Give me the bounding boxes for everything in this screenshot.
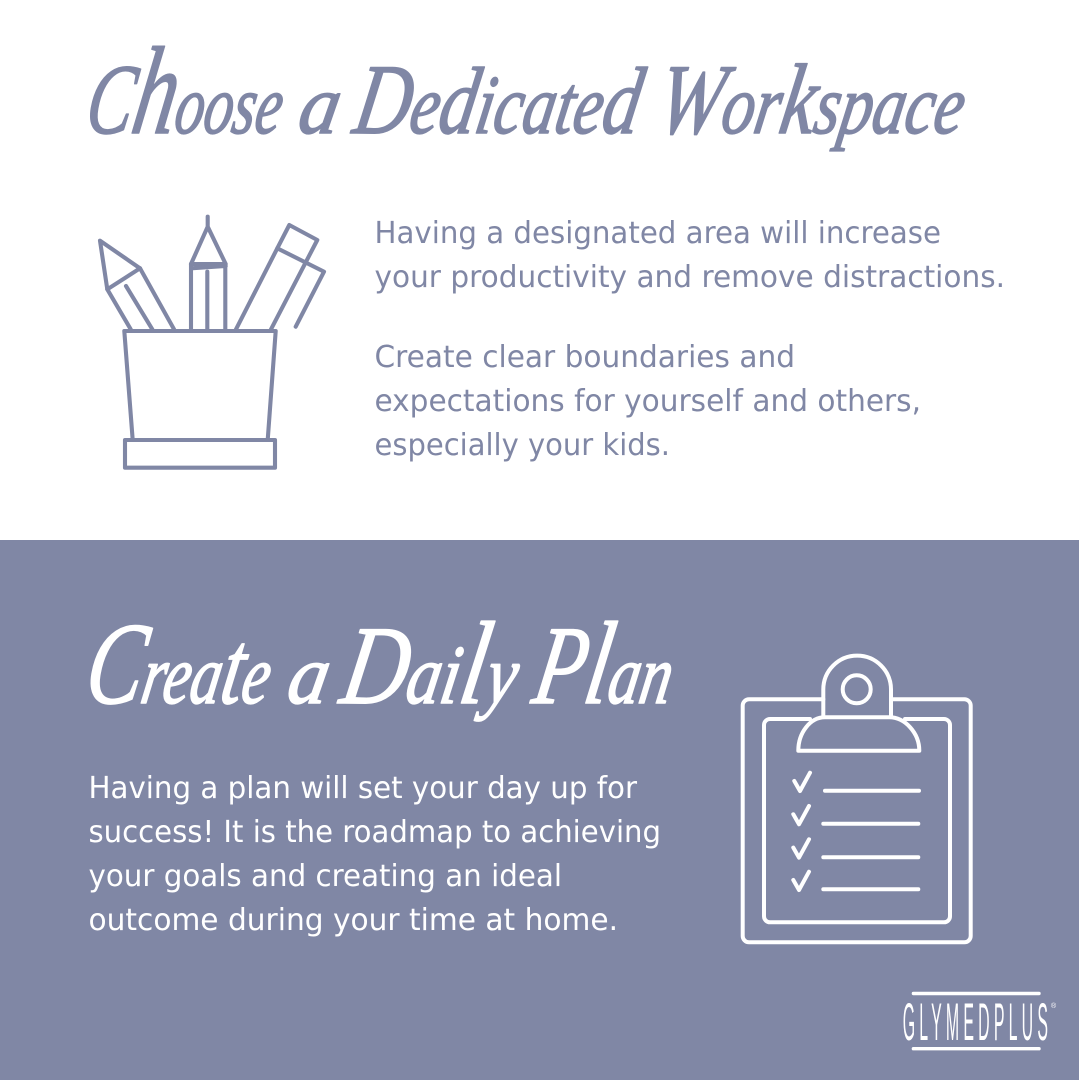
icon: clipboard checklist: [743, 656, 971, 942]
text block: workspace paragraph one: your productivity and remove distractions.: [374, 260, 1005, 295]
text block: workspace paragraph one: [374, 216, 1005, 295]
title: Create a Daily Plan: Create: [77, 599, 284, 729]
text block: daily plan paragraph: outcome during your time at home.: [88, 903, 618, 938]
icon: pencil cup: [100, 217, 324, 468]
title: Create a Daily Plan: a: [282, 630, 338, 722]
title: Create a Daily Plan: [77, 598, 687, 729]
text block: workspace paragraph two: Create clear boundaries and: [374, 340, 795, 375]
title: Choose a Dedicated Workspace: Dedicated: [346, 44, 653, 155]
text block: workspace paragraph two: [374, 340, 921, 463]
title: Choose a Dedicated Workspace: [78, 23, 979, 161]
title: Choose a Dedicated Workspace: Workspace: [650, 44, 976, 155]
title: Create a Daily Plan: Daily: [332, 598, 532, 729]
title: Choose a Dedicated Workspace: Choose: [78, 23, 297, 161]
panel: create a daily plan background: [0, 540, 1079, 1080]
text block: workspace paragraph two: expectations for yourself and others,: [374, 384, 921, 419]
text block: daily plan paragraph: [88, 771, 661, 938]
text block: daily plan paragraph: success! It is the roadmap to achieving: [88, 815, 661, 850]
title: Choose a Dedicated Workspace: a: [293, 60, 349, 152]
title: Create a Daily Plan: Plan: [525, 598, 687, 729]
logo: GlyMed Plus: GLYMEDPLUS: [903, 994, 1052, 1052]
text block: daily plan paragraph: your goals and creating an ideal: [88, 859, 562, 894]
text block: workspace paragraph one: Having a designated area will increase: [374, 216, 941, 251]
text block: daily plan paragraph: Having a plan will set your day up for: [88, 771, 638, 806]
text block: workspace paragraph two: especially your kids.: [374, 428, 670, 463]
logo: GlyMed Plus: ®: [1051, 1002, 1057, 1010]
